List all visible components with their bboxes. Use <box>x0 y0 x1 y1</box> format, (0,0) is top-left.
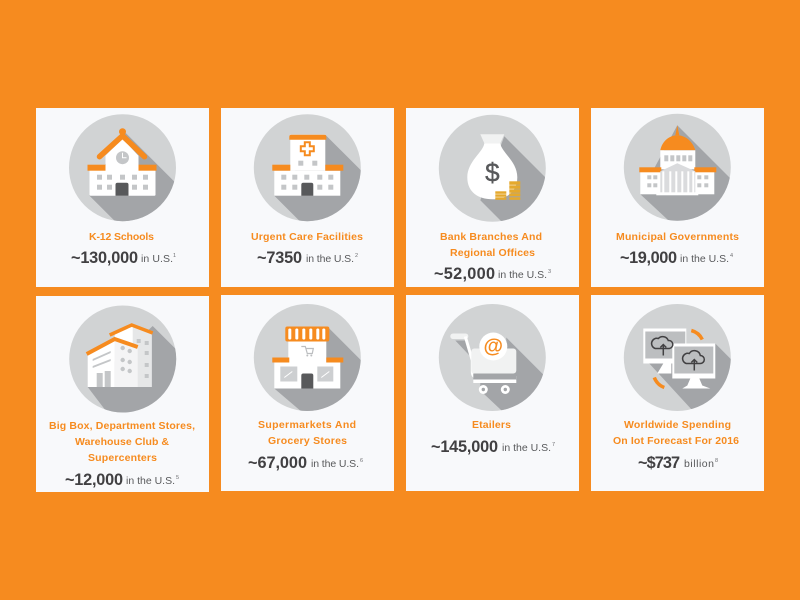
icon: shopping cart with at sign <box>438 304 546 411</box>
panel: etailers <box>406 295 579 491</box>
heading: Supermarkets And Grocery Stores: Grocery Stores <box>268 435 347 447</box>
panel: worldwide IoT spending <box>591 295 764 491</box>
figure: 7350: in the U.S. <box>306 253 354 265</box>
figure: 12,000 <box>65 471 179 489</box>
figure: 67,000 <box>248 454 363 472</box>
figure: 12,000: in the U.S. <box>126 475 175 487</box>
icon: school <box>69 114 176 222</box>
heading: Big Box, Department Stores: Warehouse Club & <box>75 436 169 448</box>
heading: Supermarkets And Grocery Stores <box>258 419 356 447</box>
figure: 145,000 <box>431 438 555 456</box>
icon: monitors with clouds <box>624 304 731 411</box>
figure: 7350: 2 <box>355 253 358 259</box>
figure: 67,000: ~67,000 <box>248 454 307 472</box>
heading: Bank Branches And Regional Offices: Regional Offices <box>450 247 535 259</box>
figure: 67,000: in the U.S. <box>311 458 359 470</box>
heading: Municipal Governments: Municipal Governments <box>616 231 739 243</box>
panel: supermarkets <box>221 295 394 491</box>
panel: bank branches <box>406 108 579 287</box>
panel: urgent care <box>221 108 394 287</box>
icon: money bag <box>438 114 546 222</box>
figure: $737 billion: billion <box>684 458 714 470</box>
icon: money bag: $ <box>485 157 500 187</box>
icon: supermarket <box>254 304 361 411</box>
icon: capitol <box>624 114 731 221</box>
figure: $737 billion <box>638 454 718 472</box>
figure: 7350: ~7350 <box>257 249 302 267</box>
icon: department store buildings <box>69 306 176 412</box>
icon: hospital <box>254 114 361 222</box>
figure: 130,000: ~130,000 <box>71 249 138 267</box>
figure: 145,000: 7 <box>552 442 555 448</box>
figure: 19,000 <box>620 249 733 267</box>
heading: Big Box, Department Stores: Supercenters <box>88 452 157 464</box>
heading: Bank Branches And Regional Offices <box>440 231 542 259</box>
figure: 130,000: 1 <box>173 253 176 259</box>
figure: 130,000: in U.S. <box>141 253 173 265</box>
figure: 19,000: 4 <box>730 253 733 259</box>
figure: 19,000: in the U.S. <box>680 253 729 265</box>
figure: 145,000: in the U.S. <box>502 442 551 454</box>
heading: Worldwide Spending On Iot Forecast: On Iot Forecast For 2016 <box>613 435 739 447</box>
figure: 12,000: ~12,000 <box>65 471 123 489</box>
figure: 12,000: 5 <box>176 475 179 481</box>
icon: shopping cart with at sign: @ <box>484 336 503 358</box>
panel: big box stores <box>36 296 209 492</box>
figure: $737 billion: 8 <box>715 458 718 464</box>
heading: Worldwide Spending On Iot Forecast <box>613 419 739 447</box>
heading: Urgent Care Facilities: Urgent Care Facilities <box>251 231 363 243</box>
figure: 52,000: ~52,000 <box>434 265 495 283</box>
figure: 7350 <box>257 249 358 267</box>
heading: Supermarkets And Grocery Stores: Supermarkets And <box>258 419 356 431</box>
heading: Etailers: Etailers <box>472 419 511 431</box>
figure: $737 billion: ~$737 <box>638 454 680 472</box>
heading: Big Box, Department Stores <box>49 420 195 464</box>
figure: 52,000: 3 <box>548 269 551 275</box>
heading: Big Box, Department Stores: Big Box, Department Stores, <box>49 420 195 432</box>
heading: Bank Branches And Regional Offices: Bank Branches And <box>440 231 542 243</box>
heading: K-12 Schools: K-12 Schools <box>89 231 154 243</box>
figure: 130,000 <box>71 249 176 267</box>
figure: 19,000: ~19,000 <box>620 249 677 267</box>
figure: 67,000: 6 <box>360 458 363 464</box>
figure: 145,000: ~145,000 <box>431 438 498 456</box>
heading: Worldwide Spending On Iot Forecast: Worldwide Spending <box>624 419 731 431</box>
panel: municipal governments <box>591 108 764 287</box>
figure: 52,000: in the U.S. <box>498 269 547 281</box>
panel: K-12 schools <box>36 108 209 287</box>
figure: 52,000 <box>434 265 551 283</box>
